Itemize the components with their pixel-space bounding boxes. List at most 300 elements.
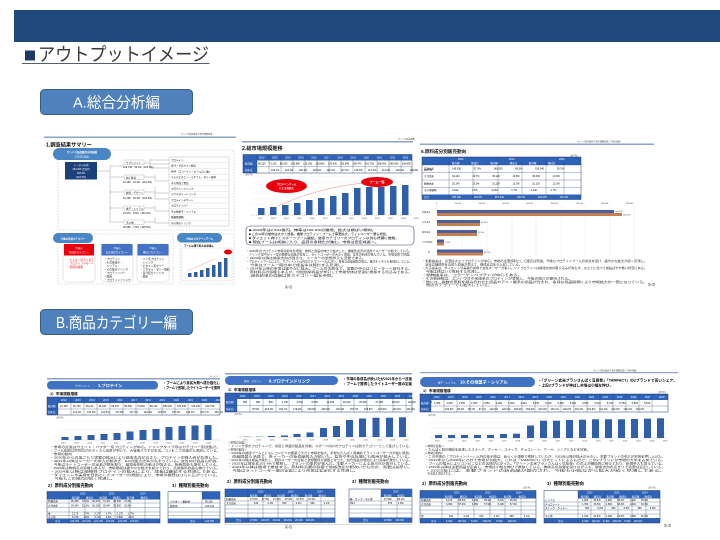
callout: protein boom [266,179,307,193]
snacks ingredient table: 販売額 構成比 販売額 構成比 販売額 構成比 [445,494,526,498]
snacks type table: 1,900 35.6% 1,920 35.6% 1,940 35.6% [582,499,649,502]
snacks notes: ＜市場の定義＞ [425,444,444,448]
product list: プロテインバー [171,204,189,208]
ingredient horizontal bar chart: 148,200 [623,214,631,216]
drink pill [225,376,338,385]
ingredient notes: ・他には、複数の原料を組み合わせた商品やアミノ酸系の商品が含まれ、多様な商品開発により市場拡大の一因となっている。 [422,280,647,284]
card: flat: 今後の [149,246,157,250]
protein ingredient table: 2,170 1.7% 2,170 1.7% 2,170 1.7% [72,512,135,516]
panel: survey results summary [44,132,236,284]
market table: 118.1% 124.1% 120.1% 118.2% 120.4% 117.0% 115.5% 117.0% 110.2% 102.0% 104.6% 103.7% [271,169,433,172]
protein ingredient table: 5,740 4.6% 5,740 4.6% 5,800 4.6% [72,516,135,519]
snacks ingredient table: 乳糖由来 [421,498,432,502]
ingredient table: 2024 [559,158,565,161]
category labels: その他 [126,220,134,224]
protein ingredient table: 2022 [80,492,86,496]
ingredient table: 乳糖由来 [424,166,435,170]
ingredient notes: ・動物由来は、コラーゲンペプチドが中心である。 [422,273,522,277]
protein ingredient table: 乳糖由来 [48,499,59,503]
drink bar chart: 2012 2013 2014 2015 2016 2017 2018 2019 2020 2021 2022 2023 2024 [243,440,409,442]
product list [169,157,229,226]
drink pill: 飲料・デザート [244,379,262,383]
drink table: 前年比 [226,407,234,411]
drink ingredient table: 510 2.1% 540 2.1% 590 2.1% [254,502,330,505]
snacks type table: スナック・クッキー [545,506,568,510]
drink ingredient table: 2024 [317,490,323,494]
protein type table: パウダー・顆粒他 [170,500,191,504]
card: flat: ドリンク [140,260,154,264]
drink ingredient table: 2022 [258,490,264,494]
snacks pill: 菓子・シリアル [438,380,456,384]
snacks ingredient table: 2024 [516,492,522,494]
panel: category other snacks cereal: サンバク製品販売市場の調査結果と今後の展望 [593,368,637,372]
panel: category protein drink [225,373,433,529]
protein notes: ・ダイエットや美容を目的としたユーザーの増加により、市場の裾野はさらに広がっている。 [50,473,220,477]
panel: ingredient sales trend: サンバク製品販売市場の調査結果と今後の展望 [577,140,621,144]
category labels [123,160,155,229]
drink comment: ・市場の急成長が続いたが2021年から一巡後 [343,376,412,381]
ingredient notes: ・その他植物は、エンドウ豆や米由来のプロテインが登場し、今後の伸びが期待される。 [422,276,572,280]
protein bar chart: (百万円) [56,416,64,420]
total market box: トータル市場 [73,163,89,167]
protein table: 27,350 30,730 35,140 46,240 55,270 65,350 74,540 88,130 105,030 105,030 115,400 124,750 [60,405,215,408]
protein notes [50,445,220,480]
market notes: ・2024年以降の市場は緩やかに拡大。ブームの沈静化で、需要の中心はリピーターへ移行する。 [246,266,412,270]
ingredient table: 2023 [509,158,515,161]
drink ingredient table: 販売額 構成比 販売額 構成比 販売額 構成比 [250,494,326,498]
ingredient horizontal bar chart [422,203,634,256]
snacks notes: ・2023年には、主要ブランドの新商品が発売され、今後も小幅ながら拡大が続く見通しである。 [425,468,665,472]
snacks ingredient heading: 2）原料成分別販売動向 [422,480,467,487]
drink ingredient table: 2023 [288,490,294,494]
snacks type table: 合計 [558,519,564,523]
card: flat: ・飲料 [140,274,148,278]
protein notes: 今後もこの傾向が続く見通し。 [50,476,115,480]
protein type table [168,492,220,523]
key points box: ■ この10年の動向は大きく成長。機能プロテイン・ブームで需要拡大、ライトユーザー層も増加。 [249,231,389,236]
ingredient notes: 近年は機能性を高めた商品が増えて、構成比は年々上昇している。 [422,262,522,266]
market table: 2012 2013 2014 2015 2016 2017 2018 2019 2020 2021 2022 2023 2024 [259,156,422,160]
protein boom mini chart [177,233,234,284]
product list: その他加工食品 [171,181,189,185]
panel: survey results summary: サンバク製品販売市場の調査結果 [181,132,212,136]
protein comment: ・ブームで登場したライトユーザーを獲得 [163,385,220,390]
key points box: ■ 現在ブームは成熟に入り、品質の多様化が進む。市場は安定成長へ。 [249,239,379,244]
ingredient horizontal bar chart: 3,910 [445,242,451,244]
card: stable growth: ・その他のドリンク [104,268,128,272]
market bar chart: (百万円) [245,172,253,176]
snacks comment: ・上記2ブランドが伸ばし市場は小幅な伸び。 [538,382,613,388]
snacks type table: 1,780 33.3% 1,800 33.3% 1,840 33.3% [582,503,649,506]
panel: category other snacks cereal: (百万円) [523,486,531,490]
market table: 60,230 71,120 88,230 105,960 125,290 150,800 176,430 203,840 238,470 262,700 268,000 280,400 290,800 [258,162,411,166]
panel: category other snacks cereal [420,368,679,528]
protein type table: 合計 [190,519,196,523]
category labels: 加工食品 [126,176,137,180]
drink type table: 570 1.9% [388,502,404,505]
panel: category other snacks cereal: (百万円) [648,486,656,490]
snacks comment: ・「グリーン玄米ブランさんぽく豆腐巻」「TAMPACT」の2ブランドで高いシェア。 [538,378,677,382]
card: high growth: 高成長カテゴリー [69,250,89,254]
protein notes: 今後はライトユーザーの定着が鍵を握り、品質差別化の動きが強まる。価格競争も激化している。 [50,462,220,466]
ingredient notes: ・乳糖由来は、高濃度ホエイプロテインが中心。市場の主要原料として販売は堅調。今後もプロテインブームの恩恵を受け、緩やかな拡大が続く見通し。 [422,259,647,263]
snacks notes [425,444,665,476]
market notes: ドリンク型やゼリー型の簡便な商品が普及し、ライトユーザーが大きく増加、女性の利用が進んでいる。市場全体で好調。 [246,252,412,256]
snacks table [420,394,679,412]
ingredient notes [422,259,655,287]
ingredient table: 253,340 100.0% 254,240 100.0% 254,065 100.0% [452,196,569,199]
card: flat: ・青汁配合ドリンク [140,271,164,275]
ingredient table: 合計 [424,195,430,199]
product list: パウチゼリードリンク [171,192,197,196]
drink table: 2012 2013 2014 2015 2016 2017 2018 2019 2020 2021 2022 2023 2024 [240,395,415,398]
snacks ingredient table: 2023 [485,492,491,494]
snacks ingredient table: 5,120 95.9% 5,180 95.9% 5,240 95.9% [446,499,518,502]
category labels: 飲料・デザート [126,190,144,194]
panel: category protein [47,374,236,523]
ingredient horizontal bar chart: 36,750 [484,252,491,254]
top banner [14,10,720,42]
ingredient table [422,157,581,200]
snacks type table: 2024 [642,492,648,494]
ingredient horizontal bar chart: 145,530 [615,211,623,213]
panel: category protein: サンバク [210,374,218,378]
drink type table: 2022 [393,490,399,494]
total market box: 254,065 百万円 [72,167,90,171]
snacks type table: 販売額 構成比 販売額 構成比 販売額 構成比 [581,494,652,498]
card: stable growth: ・プロテイン [104,257,120,261]
drink notes: ・2023年以降は微増で推移する。原材料高騰の影響で価格改定が相次いだものの、需要は底堅い。 [228,465,412,469]
ingredient horizontal bar chart: 34,410 [481,222,488,224]
button: A overall analysis: A.総合分析編 [73,94,160,112]
protein ingredient table: 他 [48,512,51,516]
drink ingredient table: 大豆由来 [226,501,237,505]
snacks notes: ・2019年から2020年にかけて市場が急拡大。これは「TAMPACT」の大ヒットによるもので、この2ブランドが市場の大半を占めている。 [425,458,665,462]
product list: その他のドリンク [171,221,192,225]
market heading: 2.総市場規模推移 [242,144,283,152]
card: high growth: ・低糖質麺類 [67,265,83,269]
protein ingredient heading: 2）原料成分別販売動向 [48,482,93,489]
snacks type table: 1,310 24.5% 1,330 24.6% 1,380 25.0% [582,515,649,518]
drink bar chart: (百万円) [234,412,242,416]
ingredient table: 動物由来 [424,182,435,186]
protein ingredient table: その他 [48,515,56,519]
ingredient heading: 5.原料成分別販売動向 [421,148,467,155]
ingredient horizontal bar chart: 32,140 [478,232,485,234]
protein type table: 124,750 [205,520,215,523]
snacks table: 100.0% 99.2% 99.1% 97.1% 120.0% 120.0% 293.2% 260.0% 100.0% 102.1% 102.0% 102.2% 101.6% 101.6% 100.0% 101.2% 102.0% [445,408,645,411]
key points box [246,226,414,245]
snacks notes: ブームの拡大によりコンビニなどの流通が広がった。「グリーン玄米ブランさんぽく豆腐巻」の売上が継続的に伸びており、新規参入も増えている。 [425,462,665,466]
market table: 前年比 [245,168,253,172]
panel: ingredient sales trend [420,140,655,287]
button: B product category: B.商品カテゴリー編 [56,313,177,332]
protein notes: ・2021年以降はメーカーの参入が相次ぎ、ECの販売比率が高まっている。女性向け商品も好調。 [50,459,220,463]
ingredient horizontal bar chart: 乳糖由来 [422,210,430,214]
snacks ingredient table: 大豆由来 [421,502,432,506]
snacks notes: ・たんぱく質の補給を訴求したスナック、クッキー、スナック、チョコレート、ケーキ、シリアルなどを対象。 [425,448,590,452]
drink type table: PET [350,502,355,505]
tree connector lines [97,159,169,223]
protein type table: 123,100 [205,505,215,508]
ingredient table: 大豆由来 [424,174,435,178]
market table: 販売額 [245,162,253,166]
market bar chart: 2012 2013 2014 2015 2016 2017 2018 2019 2020 2021 2022 2023 2024 [258,218,419,220]
drink notes: ＜市場の動向＞ [228,448,247,452]
protein notes: ・ブーム初期は男性向けのマッスル訴求が中心で、大容量パウチが主流。コンビニでの販売も増加している。 [50,448,220,452]
card: high growth: ・たんぱく質入り菓子 [67,258,94,262]
card: flat [137,244,170,282]
card: high growth: ・プロテインデザート [67,262,94,266]
protein ingredient table: 合計 [55,519,61,523]
drink ingredient table: 27,800 100.0% 28,010 100.0% 28,160 100.0% [250,519,315,522]
pill: market size: サンバク製品販売市場規模 [67,150,97,154]
protein pill [47,381,158,390]
market notes: 調査結果の詳細は各カテゴリー編を参照。 [246,274,336,278]
snacks notes: ・この市場の「プロテインバー」以外の菓子類は、長らく小規模で推移していたが、2019年以降の拡大が大きい。主要ブランドの参入が市場を押し上げた。 [425,454,665,458]
category labels: 菓子・シリアル [126,206,144,210]
snacks notes: ・2021年以降は主要商品が定着し、市場は小幅な伸びで推移している。物価高の影響を受けながらも、健康志向の高まりで需要は安定している。 [425,465,665,469]
snacks type table: チョコレート [545,502,561,506]
card: high growth [63,244,95,282]
snacks type heading: 3）種類別販売動向 [547,480,584,487]
protein boom mini chart: ブーム以降で拡大の見通し [184,244,214,248]
protein notes: ・市場の定義はウエイト・パウダー系プロテインが中心。ドリンクタイプ等はカテゴリー別途集計。 [50,445,220,449]
card: flat: ・ソイ系プロテイン [140,257,164,261]
category labels: 129,745 50.3%（101.4%） [123,165,155,169]
drink comment [343,376,412,386]
drink table [225,393,433,412]
snacks ingredient table: 2022 [454,492,460,494]
protein notes: ・2023年は物価高の影響もあるが、市場規模は緩やかな拡大を続けており、高価格帯商品も伸びている。 [50,466,220,470]
snacks ingredient table: 合計 [431,519,437,523]
market bar chart [245,172,419,220]
market table [243,154,433,173]
snacks table: 販売額 [421,401,429,405]
drink ingredient table: 乳糖由来 [226,497,237,501]
snacks notes: ＜市場の動向＞ [425,451,444,455]
snacks type table: 350 6.6% 350 6.5% 360 6.5% [585,507,656,510]
protein comment [163,380,220,390]
drink notes: ・2021年以降は成長が鈍化し、既存ユーザーの定着と新規獲得が課題となった。競合商品の増加により競争が激化している。 [228,458,412,462]
callout: protein boom: プロテインブーム [277,182,297,186]
panel: category other snacks cereal: (百万円) [658,390,666,394]
key points box: ■ ダイエット向けとスポーツブーム継続。健康カテゴリーのプロテイン以外も好調に推移。 [249,235,399,240]
pill: market size [53,148,111,160]
total market box: 106.6% [77,172,86,175]
protein table: 2012 2013 2014 2015 2016 2017 2018 2019 2020 2021 2022 2023 2024 [61,399,236,402]
card: stable growth: ・その他菓子・ [104,260,123,264]
category labels: 41,190 16.2%（101.3%） [123,180,154,184]
snacks bar chart: 2012 2013 2014 2015 2016 2017 2018 2019 2020 2021 2022 2023 2024 2025 2026 2027 2028 2029 [435,440,668,442]
ingredient horizontal bar chart: 0 20,000 40,000 60,000 80,000 100,000 120,000 140,000 160,000 [436,203,634,205]
snacks footer: 第○頁 [664,524,671,528]
drink ingredient table: 27,570 97.9% 27,670 97.9% 27,570 97.9% [250,498,316,501]
ingredient table: 145,530 57.5% 148,200 58.3% 150,340 59.2% [452,168,565,170]
protein notes: ・市場の動向 [50,452,72,456]
drink ingredient table: 合計 [236,518,242,522]
market notes: 原材料高の影響もあるが、付加価値商品が牽引して市場全体は堅調に推移する見込みである。 [246,270,412,274]
summary heading: 1.調査結果サマリー [46,140,92,148]
drink type table: 販売額 構成比 [384,494,405,498]
snacks type table: 2022 [587,492,593,494]
snacks type table: 5,340 100.0% 5,400 100.0% 5,520 100.0% [582,520,643,523]
ingredient table: 32,140 13.0% 31,230 12.3% 31,120 12.2% [452,182,560,186]
drink type table [349,489,412,522]
ingredient table: 3,910 1.6% 4,230 1.7% 4,440 1.7% [452,189,557,192]
ingredient table: 34,410 13.7% 35,120 13.8% 35,430 13.9% [452,175,560,178]
snacks table: 1,050 1,050 1,050 1,050 1,050 1,260 1,500 4,440 5,230 5,230 5,340 5,400 5,520 5,610 5,700 5,700 5,800 5,940 [434,402,651,405]
category labels: サプリメント [126,160,142,164]
protein ingredient table: 90,300 72.4% 90,370 72.4% 90,500 72.6% [71,500,132,503]
card: flat: 横ばいカテゴリー [143,250,163,254]
snacks table: 前年比 [421,407,429,411]
ingredient table: その他植物 [424,188,437,192]
protein ingredient table: 124,750 100.0% 124,750 100.0% 124,750 100.0% [70,520,139,523]
snacks ingredient table: 他 [421,514,424,518]
snacks comment [538,378,677,388]
product list: プロテイン [171,158,184,162]
ingredient notes: 他のカテゴリーでも拡大している。 [422,283,492,287]
protein table: 112.4% 120.5% 124.5% 117.9% 127.1% 124.3% 124.5% 137.0% 106.2% 103.7% 103.1% [73,411,224,414]
snacks ingredient table [420,490,536,523]
protein ingredient table: 販売額 構成比 販売額 構成比 販売額 構成比 [72,496,148,500]
drink ingredient heading: 2）原料成分別販売動向 [227,478,272,485]
product list: その他菓子・シリアル [171,209,197,213]
drink sub heading: 1）市場規模推移 [228,387,256,392]
market notes [246,249,412,289]
snacks sub heading: 1）市場規模推移 [423,388,451,393]
card: stable growth [101,244,133,282]
card: flat: ・ミネラル・ゼリー飲料 [140,268,170,272]
drink type table: 27,800 100.0% [384,519,405,522]
drink notes: ・2020年の健康ブームとともにコンビニの販路で大きく市場を拡大。手軽なたんぱく質補給でライトユーザーが大幅に増加。 [228,451,412,455]
total market box [65,162,97,180]
protein ingredient table: 2024 [140,492,146,496]
protein table: 前年比 [48,410,56,414]
snacks pill [420,377,535,387]
snacks pill: 10.その他菓子・シリアル [460,378,509,386]
market notes: ・プロテインブームにより、サプリメント以外のカテゴリーへも広がり、多様な商品展開が進む。販売チャネルも多様化している。 [246,260,412,264]
promising categories: 今後の有望カテゴリー [60,236,86,240]
card: flat: ・ビタミン系ゼリー [140,264,164,268]
protein type table: 90,300 [205,500,213,504]
drink bar chart [234,412,410,442]
callout: boom settles: ブーム一服 [370,179,384,184]
snacks ingredient table: 220 4.1% 220 4.1% 280 4.1% [449,515,530,518]
product list: MHF（コラーゲン・ヒアルロン酸） [171,169,211,173]
protein bar chart: 2012 2013 2014 2015 2016 2017 2018 2019 2020 2021 2022 2023 [61,442,212,444]
drink type table: 27,500 94.3% [384,498,405,501]
product list: プロテインデザート [171,198,194,202]
drink type table: 紙・カップ・その他 [350,497,373,501]
drink pill: 6.プロテインドリンク [269,378,310,384]
product list: 青汁・プロテイン配合 [171,164,197,168]
snacks bar chart: (百万円) [428,413,436,417]
snacks type table [544,490,660,523]
drink footer: 第○頁 [285,525,292,529]
drink notes: ・ドリンク型のプロテインで、常温と冷蔵の製品を対象。スポーツ向けのプロテインは別カテゴリーとして集計している。 [228,444,412,448]
snacks notes: 引き続き注目される。 [425,472,453,476]
drink notes [228,440,412,472]
card: stable growth: シリアル [104,264,118,268]
card: stable growth: 安定成長カテゴリー [106,250,129,254]
product list: 低糖質麺類 [171,215,184,219]
market notes: ・2023年のプロテイン市場は前年比増加、飲料と食品の伸びで拡大した。機能性表示の浸透でユーザーが拡大している。 [246,249,412,253]
snacks type table: シリアル [545,498,556,502]
protein table [47,397,236,415]
snacks ingredient table: 3,050 57.9% 3,050 57.9% 3,100 57.9% [446,503,518,506]
protein pill: 1.プロテイン [98,382,122,389]
market notes: 今後はブーム一服の中で成長率は鈍化する見通し。 [246,263,346,267]
card: stable growth: ・プロテインドリンク [104,278,131,282]
ingredient horizontal bar chart: 大豆由来 [422,220,430,224]
panel: total market trend: サンバク製品調査 [398,137,415,141]
drink notes: ＜市場の定義＞ [228,440,247,444]
ingredient horizontal bar chart: 他 [428,250,430,254]
panel: ingredient sales trend: (百万円) [570,154,578,158]
category labels: 41,190 16.2%（103.3%） [123,196,154,200]
snacks ingredient table: 5,340 100.0% 5,400 100.0% 5,520 100.0% [446,520,517,523]
snacks bar chart [428,413,668,442]
protein bar chart [56,416,220,444]
ingredient table: 販売額 構成比 販売額 構成比 販売額 構成比 [452,161,556,165]
drink table: 484 380 830 1,700 3,030 5,030 12,320 16,040 25,300 27,030 28,010 28,020 28,800 [243,401,433,404]
snacks type table: 2023 [614,492,620,494]
drink comment: ・ブームで獲得したライトユーザー層の定着 [343,381,412,386]
drink table: 78.5% 218.4% 182.7% 178.9% 166.0% 245.0% 130.2% 157.7% 106.8% 103.6% 100.0% 102.8% [252,408,416,411]
protein ingredient table: 26,340 21.1% 26,100 20.9% 25,900 20.8% [71,504,132,508]
protein notes: ・2020年からの巣ごもり需要の拡大により健康志向が高まり、プロテインの購入者が急増した。 [50,456,220,460]
card: high growth: 今後の [75,246,83,250]
panel: total market trend [242,137,433,289]
ingredient notes: 第○頁 [648,282,655,286]
market notes: 第○頁 [285,285,292,289]
product list: マルチビタミン・ミネラル・ゼリー飲料 [171,175,217,179]
callout: boom settles [361,177,393,187]
drink notes: ・2022年は前年比103.6%で推移し、ブランドの集約が進んだ。主要メーカーによる寡占化が進行している。 [228,462,412,466]
market notes: ・2020年以降は健康志向が強まり、メーカーの新規参入も活発である。 [246,256,366,260]
category labels: 20,055 7.8%（105.5%） [123,225,152,229]
drink table: 販売額 [226,400,234,404]
ingredient horizontal bar chart: 動物由来 [422,230,430,234]
key points box: ■ 2023年は2,541億円。伸率は102.6%の微増。拡大は横ばい傾向。 [249,227,376,232]
category labels: 21,670 8.5%（104.4%） [123,211,152,215]
card: stable growth: ・飲料 [104,274,112,278]
protein type heading: 3）種類別販売動向 [172,482,209,489]
pill: market size: （2023年見込） [73,154,91,158]
snacks table: 2012 2013 2014 2015 2016 2017 2018 2019 2020 2021 2022 2023 2024 2025 2026 2027 2028 2029 [434,396,679,399]
protein ingredient table: 大豆由来 [48,504,59,508]
callout: protein boom: による急拡大 [279,186,294,190]
promising categories [53,233,173,284]
card: stable growth: 今後の [113,246,121,250]
protein boom mini chart: 今後のプロテインブーム [186,236,214,240]
heading: output image: アウトプットイメージ [38,44,209,65]
ingredient horizontal bar chart: その他植物 [422,240,432,244]
drink ingredient table [225,489,335,522]
drink notes: 今後はライトユーザー層の定着により市場は安定化する見通し。 [228,468,358,472]
drink notes: 商品開発も活発で、各メーカーの新商品投入が続いた。女性や中高年層にも飲用が拡大している。 [228,454,412,458]
button: B product category [40,310,192,334]
product list: プロテインドリンク [171,186,194,190]
ingredient notes: ・大豆由来は、ダイエットや美容の訴求で女性ユーザーが多い。ソイプロテインは健康志向の取り込みが進むが、ホエイに比べて成長はやや鈍い状況にある。 [422,266,647,270]
ingredient notes: 今後は横ばいで推移する見通し。 [422,270,482,274]
protein type table: 錠剤他 [170,504,178,508]
card: stable growth: ・プロテインバー [104,271,126,275]
total market box: (163.3%) [76,176,86,179]
protein pill: サプリメント [75,384,91,388]
